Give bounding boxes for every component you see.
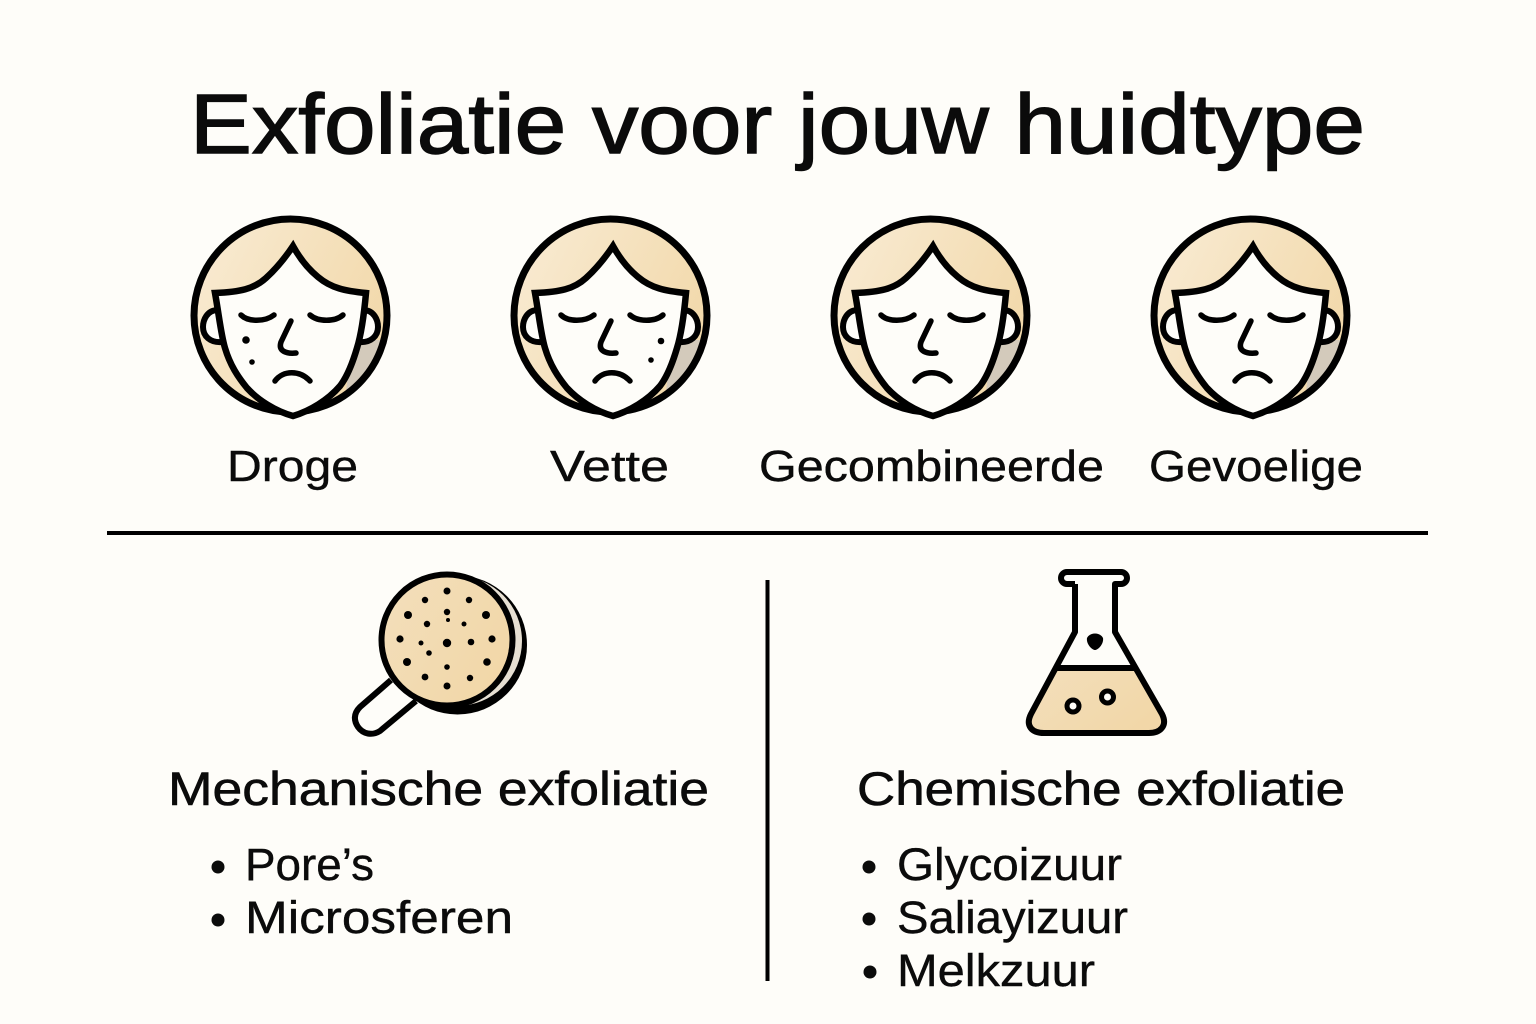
panel: chemical exfoliation [857, 572, 1345, 996]
list: chemical items: Glycoizuur [897, 839, 1122, 890]
heading: Mechanische exfoliatie: Mechanische exfoliatie [168, 762, 709, 815]
title: Exfoliatie voor jouw huidtype [190, 77, 1365, 171]
list: chemical items: Saliayizuur [897, 892, 1128, 943]
skin type: Droge [194, 219, 387, 491]
icon: combination skin face [834, 219, 1027, 416]
icon: oily skin face [514, 219, 707, 416]
list: mechanical items: Pore’s [245, 839, 374, 890]
panel: mechanical exfoliation [168, 574, 709, 943]
label: Vette: Vette [550, 442, 669, 491]
list: mechanical items: Microsferen [245, 892, 513, 943]
skin type: Gecombineerde [759, 219, 1104, 491]
skin type: Vette [514, 219, 707, 491]
icon: scrub disc with handle [355, 574, 527, 734]
label: Droge: Droge [227, 442, 358, 491]
skin type: Gevoelige [1149, 219, 1363, 491]
list: chemical items: Melkzuur [897, 945, 1095, 996]
icon: dry skin face [194, 219, 387, 416]
label: Gevoelige: Gevoelige [1149, 442, 1363, 491]
icon: sensitive skin face [1154, 219, 1347, 416]
list: mechanical items [212, 839, 513, 943]
heading: Chemische exfoliatie: Chemische exfoliatie [857, 762, 1345, 815]
list: chemical items [862, 839, 1128, 996]
label: Gecombineerde: Gecombineerde [759, 442, 1104, 491]
icon: flask with liquid [1029, 572, 1164, 733]
